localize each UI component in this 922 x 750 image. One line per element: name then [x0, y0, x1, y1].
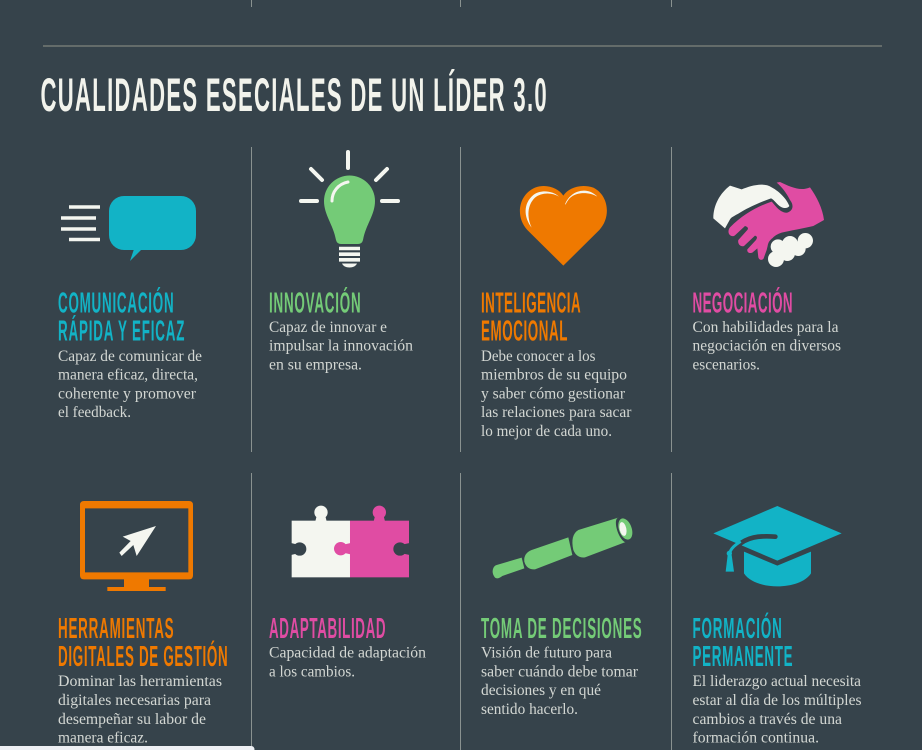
text block: estar al día de los múltiples — [692, 692, 862, 709]
heading: INTELIGENCIA — [481, 287, 581, 319]
text block: Visión de futuro para — [481, 645, 612, 662]
text block: El liderazgo actual necesita — [692, 673, 861, 690]
text block — [692, 673, 862, 746]
title: CUALIDADES ESECIALES DE UN LÍDER 3.0 — [40, 69, 547, 121]
heading: FORMACIÓN — [692, 612, 782, 644]
icon: speech bubble — [61, 196, 196, 261]
text block — [692, 319, 841, 373]
text block: y saber cómo gestionar — [481, 385, 625, 402]
icon: puzzle pieces — [291, 506, 410, 577]
heading: TOMA DE DECISIONES — [481, 612, 642, 644]
text block: el feedback. — [58, 404, 131, 421]
heading: NEGOCIACIÓN — [692, 287, 793, 319]
heading: ADAPTABILIDAD — [269, 612, 386, 644]
text block: cambios a través de una — [692, 711, 842, 728]
text block — [58, 348, 202, 421]
icon: telescope — [493, 516, 635, 578]
text block: manera eficaz, directa, — [58, 366, 198, 384]
text block: negociación en diversos — [692, 338, 841, 354]
heading: RÁPIDA Y EFICAZ — [58, 315, 184, 347]
heading — [58, 612, 228, 672]
text block: coherente y promover — [58, 385, 196, 402]
heading: PERMANENTE — [692, 640, 793, 672]
panel: herramientas digitales de gestión — [58, 501, 228, 746]
text block: digitales necesarias para — [58, 692, 211, 709]
text block: Debe conocer a los — [481, 348, 596, 365]
panel: adaptabilidad — [269, 506, 426, 680]
icon: light bulb — [301, 152, 398, 268]
panel: inteligencia emocional — [481, 186, 632, 440]
panel: negociación — [692, 182, 841, 373]
text block: decisiones y en qué — [481, 682, 601, 699]
heading: INNOVACIÓN — [269, 287, 361, 319]
text block: miembros de su equipo — [481, 366, 627, 384]
text block — [58, 673, 222, 746]
icon: handshake — [713, 182, 824, 268]
text block: sentido hacerlo. — [481, 701, 578, 718]
panel: innovación — [269, 152, 413, 373]
panel: comunicación rápida y eficaz — [58, 196, 202, 421]
text block: Con habilidades para la — [692, 319, 839, 336]
text block: impulsar la innovación — [269, 338, 413, 354]
text block: lo mejor de cada uno. — [481, 423, 612, 440]
text block: Capaz de comunicar de — [58, 348, 202, 365]
icon: monitor with cursor — [80, 501, 193, 591]
panel: formación permanente — [692, 506, 862, 746]
text block — [481, 348, 632, 440]
text block: Capaz de innovar e — [269, 319, 387, 336]
text block — [269, 645, 426, 680]
text block: desempeñar su labor de — [58, 711, 206, 728]
text block: saber cuándo debe tomar — [481, 664, 638, 680]
heading: DIGITALES DE GESTIÓN — [58, 640, 228, 672]
text block: a los cambios. — [269, 664, 355, 680]
heading: HERRAMIENTAS — [58, 612, 174, 644]
text block: escenarios. — [692, 356, 760, 373]
text block: en su empresa. — [269, 356, 362, 373]
heading — [692, 612, 793, 672]
heading: EMOCIONAL — [481, 315, 567, 347]
heading: COMUNICACIÓN — [58, 287, 174, 319]
icon: graduation cap — [713, 506, 842, 586]
text block: manera eficaz. — [58, 730, 148, 746]
text block — [269, 319, 413, 373]
icon: heart — [520, 186, 607, 266]
text block: las relaciones para sacar — [481, 404, 632, 421]
text block: Dominar las herramientas — [58, 673, 222, 690]
text block: Capacidad de adaptación — [269, 645, 426, 662]
heading — [58, 287, 184, 347]
text block — [481, 645, 638, 718]
panel: toma de decisiones — [481, 516, 642, 718]
heading — [481, 287, 581, 347]
text block: formación continua. — [692, 730, 819, 746]
